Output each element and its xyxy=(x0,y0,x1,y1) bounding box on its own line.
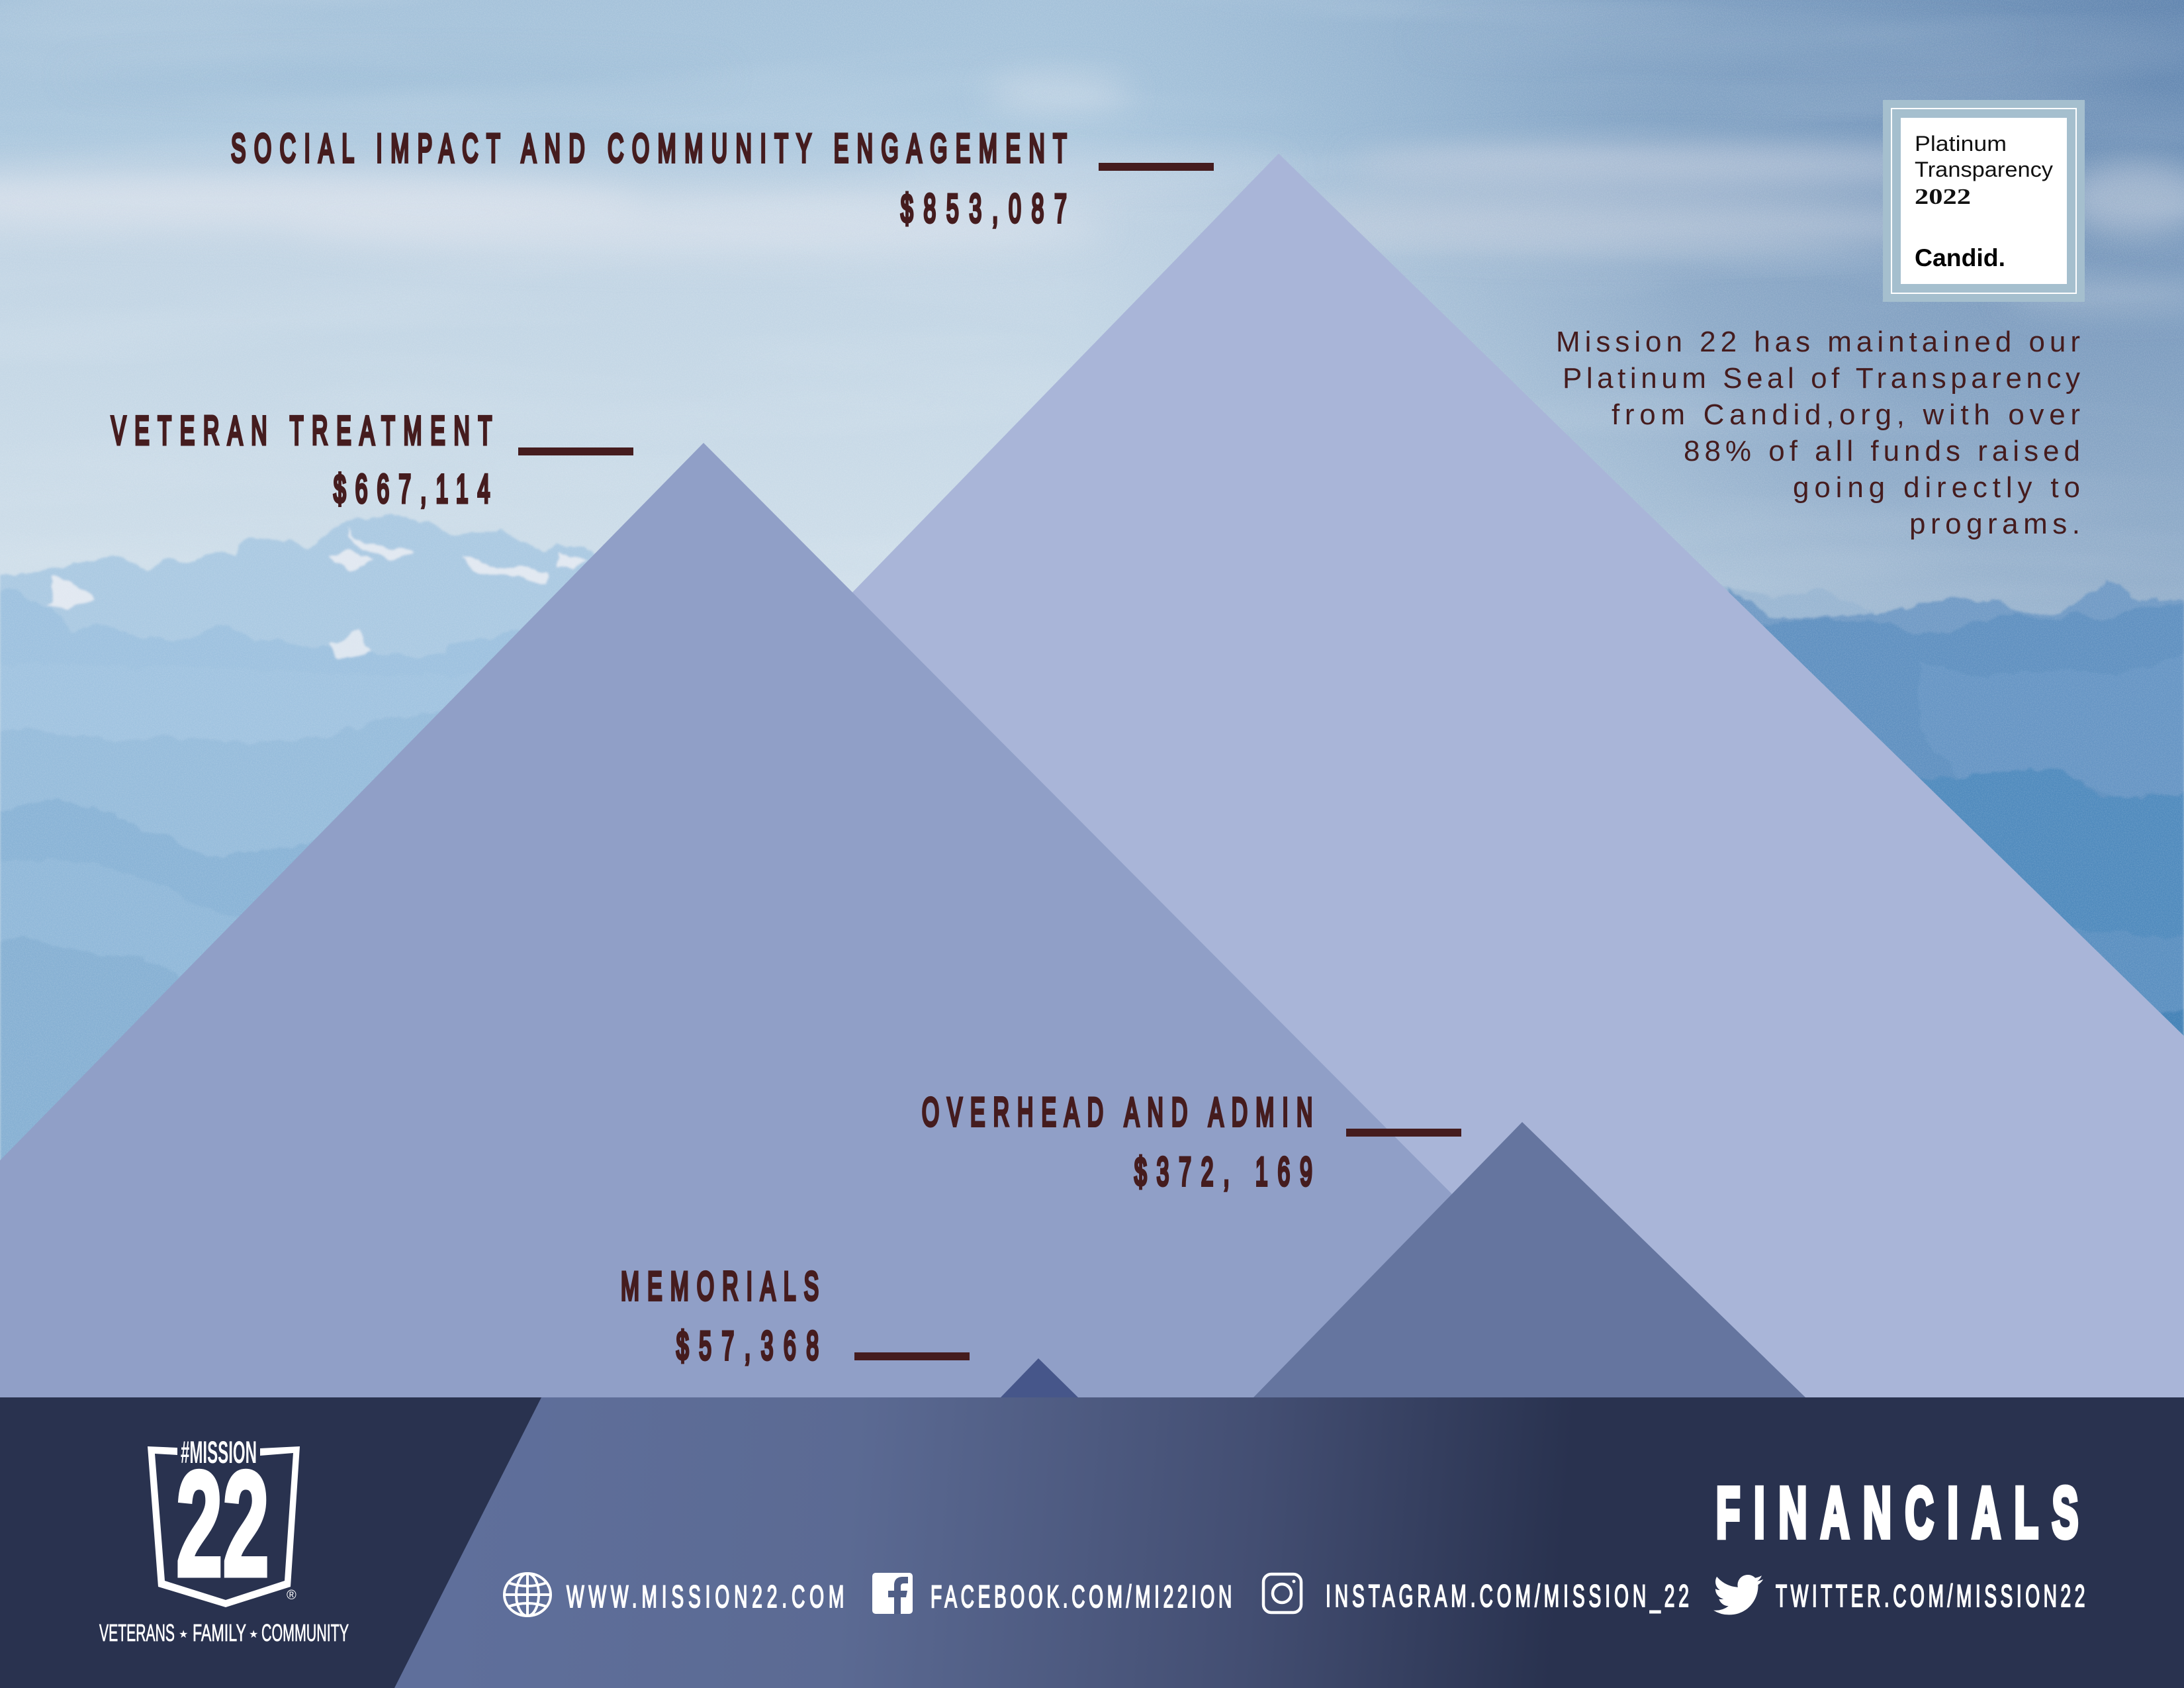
label: veteran treatment xyxy=(111,409,633,512)
text block: transparency statement: programs. xyxy=(1909,508,2080,540)
cloud streak texture xyxy=(0,0,2184,662)
logo: Mission 22 shield: ® xyxy=(287,1588,296,1603)
contact: website: WWW.MISSION22.COM xyxy=(567,1580,844,1615)
logo: Mission 22 shield: ★ xyxy=(249,1628,258,1640)
text block: transparency statement: 88% of all funds raised xyxy=(1684,435,2080,467)
right mountains xyxy=(1707,582,2184,1125)
text block: transparency statement xyxy=(1556,326,2080,540)
label: veteran treatment: $667,114 xyxy=(334,467,490,512)
contact: twitter: TWITTER.COM/MISSION22 xyxy=(1776,1579,2085,1614)
contact: facebook xyxy=(872,1573,1232,1615)
contact: website xyxy=(504,1573,844,1616)
mountain: veteran treatment xyxy=(0,443,1655,1397)
label: memorials xyxy=(621,1264,970,1368)
mountain: memorials xyxy=(1001,1358,1078,1397)
label: overhead and admin: $372, 169 xyxy=(1134,1150,1312,1194)
logo: Mission 22 shield: 22 xyxy=(176,1440,269,1607)
badge: Candid platinum transparency seal xyxy=(1883,100,2085,302)
text block: transparency statement: Mission 22 has maintained our xyxy=(1556,326,2080,358)
text block: transparency statement: Platinum Seal of Transparency xyxy=(1563,362,2080,395)
label: veteran treatment: VETERAN TREATMENT xyxy=(111,409,492,453)
icon: instagram xyxy=(1263,1574,1301,1613)
footer band xyxy=(0,1397,2184,1688)
label: social impact and community engagement: $853,087 xyxy=(901,187,1067,231)
label: memorials: MEMORIALS xyxy=(621,1264,819,1309)
mountain: overhead and admin xyxy=(1253,1122,1805,1397)
logo: Mission 22 shield: COMMUNITY xyxy=(261,1619,349,1646)
badge: Candid platinum transparency seal: Transparency xyxy=(1915,158,2053,181)
icon: globe xyxy=(504,1573,551,1616)
clouds xyxy=(0,30,2184,311)
contact: instagram: INSTAGRAM.COM/MISSION_22 xyxy=(1326,1579,1689,1614)
label: social impact and community engagement: SOCIAL IMPACT AND COMMUNITY ENGAGEMENT xyxy=(231,126,1067,171)
badge: Candid platinum transparency seal: 2022 xyxy=(1915,185,1971,209)
label: memorials: $57,368 xyxy=(676,1324,819,1368)
label: overhead and admin: OVERHEAD AND ADMIN xyxy=(922,1090,1312,1135)
badge: Candid platinum transparency seal: Platinum xyxy=(1915,132,2007,156)
icon: facebook xyxy=(872,1573,913,1614)
text block: transparency statement: going directly to xyxy=(1793,471,2080,504)
logo: Mission 22 shield xyxy=(99,1434,349,1646)
logo: Mission 22 shield: VETERANS xyxy=(99,1619,175,1646)
text block: transparency statement: from Candid,org, with over xyxy=(1612,399,2080,431)
logo: Mission 22 shield: #MISSION xyxy=(181,1434,257,1470)
label: social impact and community engagement xyxy=(231,126,1214,231)
title: FINANCIALS: FINANCIALS xyxy=(1716,1473,2078,1553)
badge: Candid platinum transparency seal: Candid. xyxy=(1915,244,2005,271)
icon: twitter bird xyxy=(1713,1575,1763,1615)
logo: Mission 22 shield: FAMILY xyxy=(193,1619,246,1646)
left mountains xyxy=(0,514,728,1192)
logo: Mission 22 shield: ★ xyxy=(179,1628,188,1640)
mountain: social impact (largest triangle) xyxy=(463,154,2184,1397)
label: overhead and admin xyxy=(922,1090,1461,1194)
contact: facebook: FACEBOOK.COM/MI22ION xyxy=(931,1580,1232,1615)
